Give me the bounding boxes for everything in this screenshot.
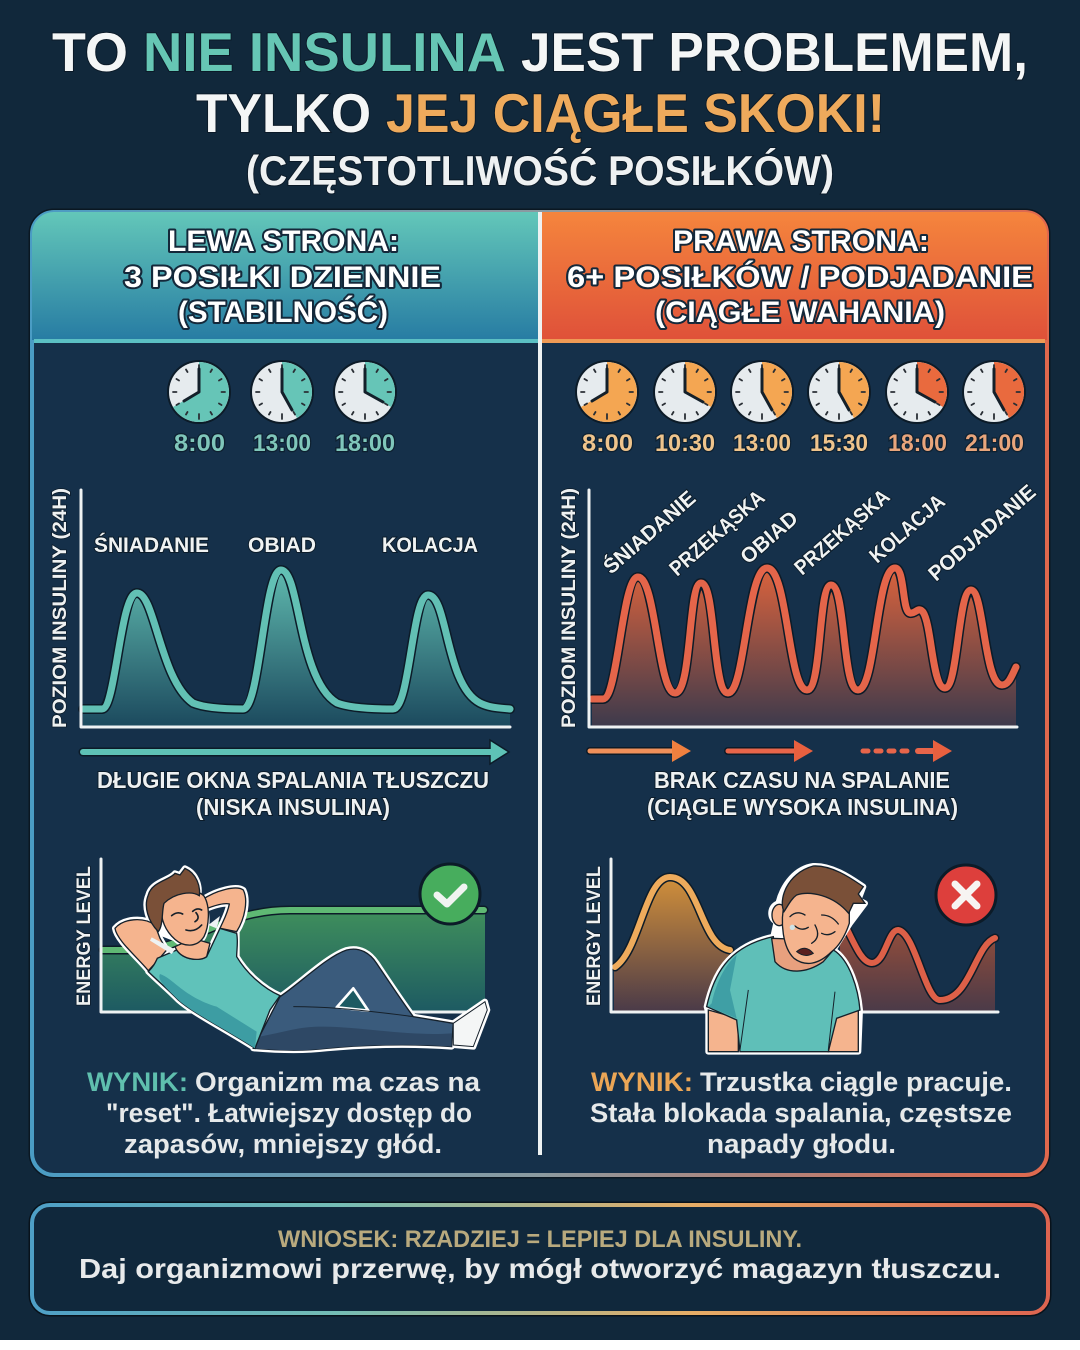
illustration: relaxed man [115,868,487,1050]
clocks: right side: 15:30 [810,430,868,457]
caption: right chart [647,767,958,820]
panel header: right side: 6+ POSIŁKÓW / PODJADANIE [567,260,1033,294]
arrow: long fat burning window [83,740,509,764]
clocks: right side: 13:00 [733,430,791,457]
text block: left result: Organizm ma czas na [195,1067,481,1097]
chart: energy left [74,859,485,1012]
panel header: right side: PRAWA STRONA: [673,225,929,258]
text block: right result: Trzustka ciągle pracuje. [700,1067,1012,1097]
caption: left chart: (NISKA INSULINA) [196,794,390,820]
chart: insulin right: PRZEKĄSKA [665,486,769,581]
title [52,21,1028,194]
text block: right result: Stała blokada spalania, częstsze [590,1098,1012,1128]
text block: right result [590,1067,1012,1159]
title: JEJ CIĄGŁE SKOKI! [386,82,885,144]
conclusion box [32,1205,1048,1313]
icon: check badge [420,864,480,924]
conclusion box: WNIOSEK: RZADZIEJ = LEPIEJ DLA INSULINY. [278,1226,802,1253]
caption: right chart: (CIĄGLE WYSOKA INSULINA) [647,794,958,820]
chart: insulin left: ŚNIADANIE [94,533,209,557]
text block: left result: "reset". Łatwiejszy dostęp do [106,1098,472,1128]
title: JEST PROBLEMEM, [521,21,1028,83]
chart: energy right: ENERGY LEVEL [584,866,605,1006]
chart: energy right [584,859,998,1012]
chart: insulin left [50,488,510,728]
text block: left result: zapasów, mniejszy głód. [124,1129,442,1159]
clocks: right side: 18:00 [888,430,947,457]
chart: insulin right: PODJADANIE [924,481,1040,586]
panel header: right side: (CIĄGŁE WAHANIA) [655,296,945,329]
chart: insulin right: OBIAD [736,507,803,569]
text block: left result [87,1067,481,1159]
chart: insulin left: POZIOM INSULINY (24H) [50,488,71,728]
clocks: right side: 10:30 [655,430,715,457]
clocks: left side: 13:00 [253,430,311,457]
chart: insulin right [559,481,1040,728]
caption: left chart: DŁUGIE OKNA SPALANIA TŁUSZCZU [97,767,489,793]
title: TO [52,21,128,83]
text block: right result: WYNIK: [591,1067,693,1097]
panel header: left side: 3 POSIŁKI DZIENNIE [124,261,441,294]
panel header: left side: (STABILNOŚĆ) [178,295,388,329]
chart: insulin right: PRZEKĄSKA [790,485,894,580]
caption: right chart: BRAK CZASU NA SPALANIE [654,767,950,793]
conclusion box: Daj organizmowi przerwę, by mógł otworzyć magazyn tłuszczu. [79,1253,1001,1284]
chart: energy left: ENERGY LEVEL [74,866,95,1006]
text block: left result: WYNIK: [87,1067,188,1097]
chart: insulin right: ŚNIADANIE [599,486,700,579]
chart: insulin left: OBIAD [248,534,316,557]
chart: insulin right: KOLACJA [865,490,950,568]
text block: right result: napady głodu. [707,1129,896,1159]
clocks: right side: 8:00 [582,430,633,457]
clocks: left side: 18:00 [335,430,395,457]
title: (CZĘSTOTLIWOŚĆ POSIŁKÓW) [246,146,834,194]
icon: cross badge [936,865,996,925]
chart: insulin left: KOLACJA [382,534,478,557]
clocks: right side: 21:00 [965,430,1024,457]
chart: insulin right: POZIOM INSULINY (24H) [559,488,580,728]
clocks: left side [167,360,397,457]
panel header: right side [542,212,1047,343]
title: NIE INSULINA [143,21,506,83]
panel header: left side: LEWA STRONA: [168,225,399,258]
title: TYLKO [196,82,371,144]
panel header: left side [32,212,539,343]
illustration: tired man [707,866,865,1052]
clocks: left side: 8:00 [174,430,225,457]
arrows: interrupted burning [590,740,952,762]
main comparison panel [32,212,1047,1175]
caption: left chart [97,767,489,820]
clocks: right side [575,360,1026,457]
